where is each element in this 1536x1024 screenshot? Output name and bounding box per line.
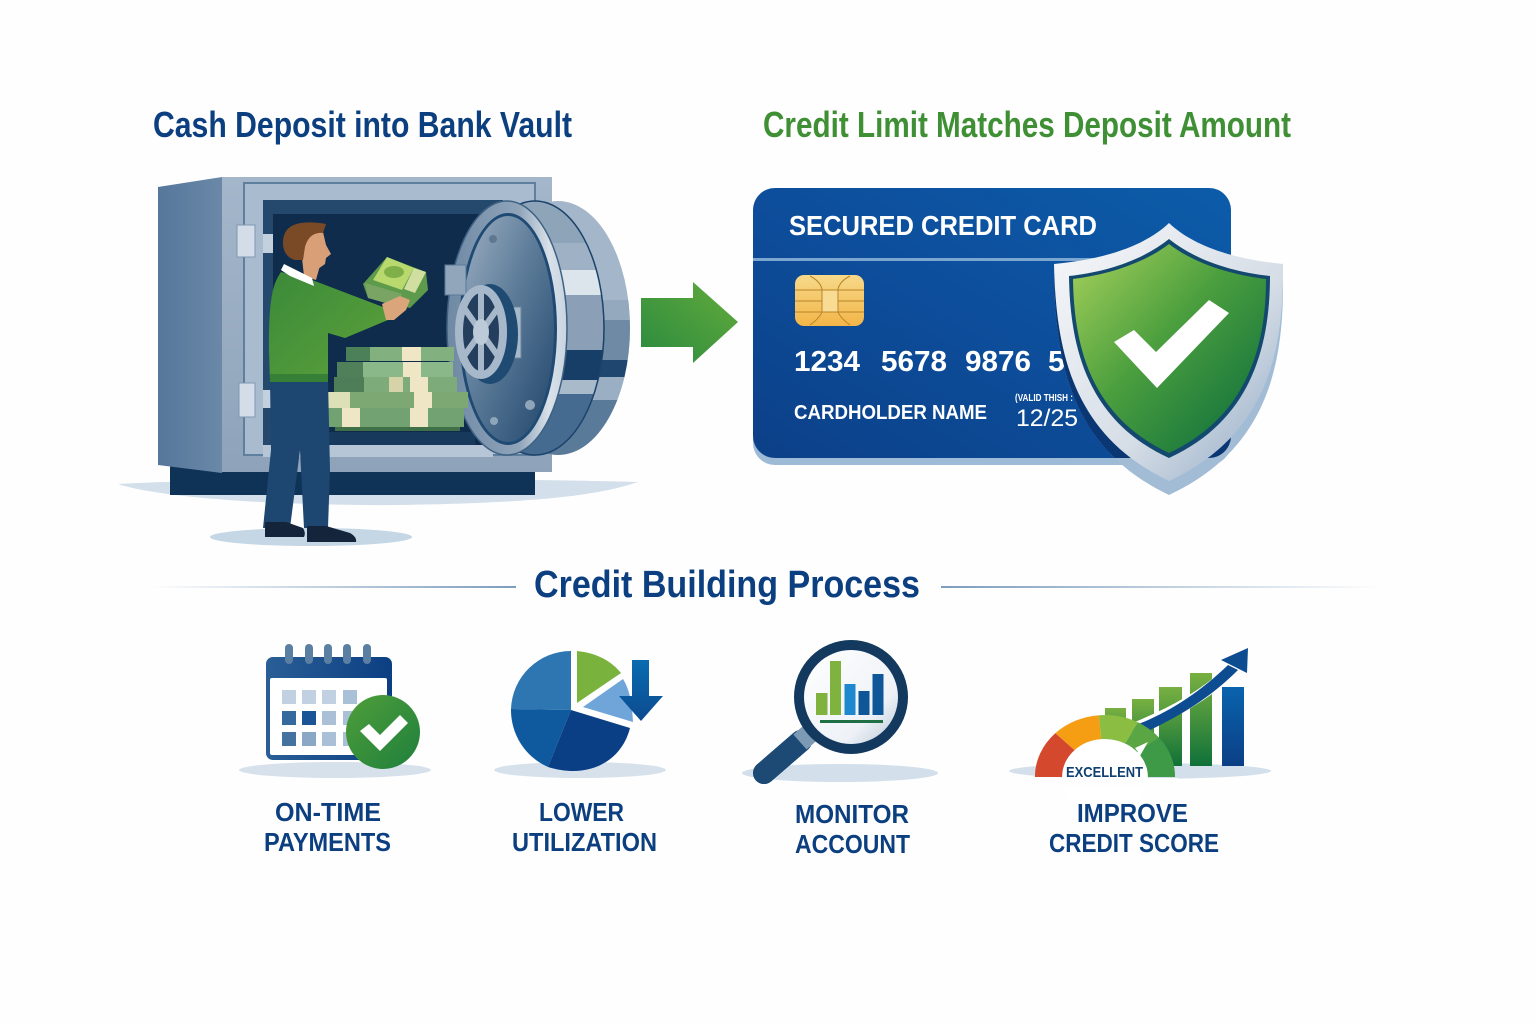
expiry date: 12/25: [1016, 405, 1078, 432]
heading: cash deposit: Cash Deposit into Bank Vault: [153, 104, 572, 145]
door front ring: [447, 201, 567, 455]
gauge label: EXCELLENT: [1066, 764, 1143, 781]
person shoes: [265, 522, 356, 542]
label: [264, 797, 391, 857]
label: [1049, 798, 1219, 858]
person torso and arm: [269, 272, 388, 382]
money stacks: [328, 347, 468, 431]
label: PAYMENTS: [264, 827, 391, 857]
vault floor shadow: [118, 479, 638, 505]
step: monitor account: [742, 640, 938, 859]
section divider right: [941, 586, 1381, 588]
section divider left: [150, 586, 516, 588]
growth bars: [1105, 673, 1244, 766]
pie shadow: [494, 762, 666, 778]
card number: 9876: [965, 346, 1031, 378]
person holding cash: [210, 222, 428, 546]
shield with check: [1054, 223, 1283, 495]
pie chart icon: [511, 651, 633, 771]
card number: 5: [1048, 346, 1065, 378]
person hem: [270, 374, 328, 382]
vault lower lip: [263, 445, 493, 457]
label: [512, 797, 657, 857]
person hand: [382, 296, 410, 320]
label: CREDIT SCORE: [1049, 828, 1219, 858]
gauge shadow: [1009, 763, 1271, 779]
door face: [459, 213, 557, 445]
card number: [794, 346, 1065, 378]
vault door: [445, 200, 630, 456]
person neck and collar: [302, 258, 322, 280]
heading: credit limit: Credit Limit Matches Deposit Amount: [763, 104, 1291, 145]
card number: 1234: [794, 346, 860, 378]
arrow: deposit to card: [641, 282, 738, 363]
illustration: bank vault: [118, 177, 638, 546]
infographic canvas: [118, 110, 1354, 854]
cash in hands: [363, 257, 428, 308]
rising arrow: [1136, 648, 1248, 733]
vault opening: [263, 200, 503, 445]
label: [795, 799, 910, 859]
label: IMPROVE: [1077, 798, 1188, 828]
card chip: [795, 275, 864, 326]
magnifier icon: [764, 640, 908, 773]
magnifier shadow: [742, 764, 938, 782]
vault inner frame: [244, 183, 535, 455]
shield dark outline: [1069, 239, 1270, 458]
shield shadow on card: [1054, 278, 1231, 458]
step: on-time payments: [239, 644, 431, 857]
shield green face: [1073, 244, 1266, 453]
calendar shadow: [239, 762, 431, 778]
door outer rim: [548, 201, 630, 455]
valid thru label: (VALID THISH :: [1015, 393, 1073, 404]
shield drop shadow: [1054, 237, 1283, 495]
step: improve credit score: [1009, 648, 1271, 858]
label: UTILIZATION: [512, 827, 657, 857]
person face: [303, 232, 331, 269]
credit gauge: [1032, 727, 1178, 815]
check badge: [346, 695, 420, 769]
vault front frame: [222, 177, 552, 472]
heading: credit building process: Credit Building Process: [534, 564, 920, 606]
card divider line: [753, 258, 1231, 261]
vault wheel: [459, 284, 518, 384]
gauge needle: [1116, 742, 1148, 761]
person legs: [263, 380, 330, 528]
person shadow: [210, 528, 412, 546]
label: ON-TIME: [275, 797, 381, 827]
calendar icon: [266, 644, 392, 760]
card body: [753, 188, 1231, 458]
vault side panel: [158, 177, 222, 473]
card number: 5678: [881, 346, 947, 378]
person hair: [283, 222, 326, 260]
label: ACCOUNT: [795, 829, 910, 859]
illustration: secured credit card: [753, 188, 1283, 495]
label: MONITOR: [795, 799, 909, 829]
vault hinges: [237, 225, 273, 417]
vault base: [170, 465, 535, 495]
label: LOWER: [539, 797, 624, 827]
person back arm: [330, 296, 372, 324]
cardholder name: CARDHOLDER NAME: [794, 402, 987, 424]
step: lower utilization: [494, 651, 666, 857]
card shadow edge: [753, 195, 1231, 465]
door middle rim: [522, 202, 604, 454]
shield rim: [1054, 223, 1283, 481]
shield check mark: [1114, 300, 1229, 388]
down arrow: [619, 660, 663, 721]
card title: SECURED CREDIT CARD: [789, 210, 1097, 241]
